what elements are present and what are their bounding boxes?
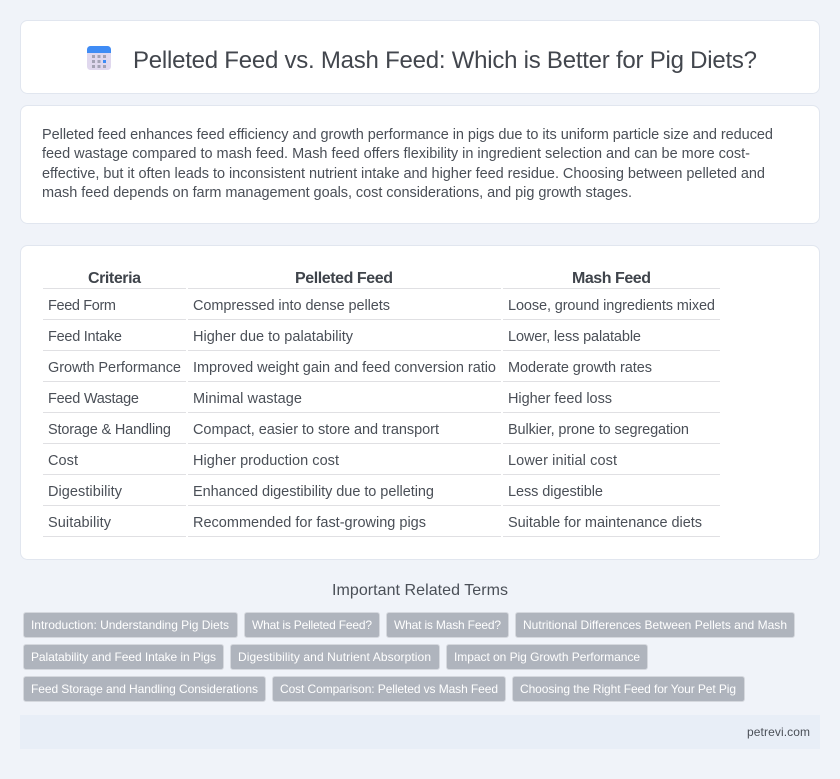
related terms chips: Cost Comparison: Pelleted vs Mash Feed [280, 682, 498, 696]
row: feed wastage: Minimal wastage [193, 391, 302, 407]
row: suitability [48, 515, 702, 531]
related terms chips: Choosing the Right Feed for Your Pet Pig [520, 682, 736, 696]
intro text: feed wastage compared to mash feed. Mash feed offers flexibility in ingredient selection and can be more cost- [42, 146, 750, 162]
row: feed intake: Higher due to palatability [193, 329, 354, 345]
row: suitability: Suitable for maintenance diets [508, 515, 702, 531]
row: storage and handling [48, 422, 689, 438]
row: digestibility: Enhanced digestibility due to pelleting [193, 484, 434, 500]
row: digestibility: Less digestible [508, 484, 603, 500]
related terms chips: Impact on Pig Growth Performance [454, 650, 640, 664]
title: Pelleted Feed vs. Mash Feed: Which is Better for Pig Diets? [133, 47, 757, 74]
row: feed wastage: Feed Wastage [48, 391, 139, 407]
row: cost: Higher production cost [193, 453, 339, 469]
row: cost: Lower initial cost [508, 453, 617, 469]
related terms heading: Important Related Terms [332, 582, 508, 599]
related terms chips: What is Pelleted Feed? [252, 618, 372, 632]
table header: Mash Feed [572, 270, 651, 287]
intro text: Pelleted feed enhances feed efficiency and growth performance in pigs due to its uniform particle size and reduced [42, 127, 773, 143]
icon: calendar [87, 46, 111, 70]
footer bar [20, 715, 820, 749]
related terms chips: Digestibility and Nutrient Absorption [238, 650, 431, 664]
row: growth performance: Improved weight gain and feed conversion ratio [193, 360, 496, 376]
row: feed intake [48, 329, 641, 345]
intro text [42, 127, 773, 201]
table header: Pelleted Feed [295, 270, 393, 287]
row: feed form: Loose, ground ingredients mixed [508, 298, 715, 314]
row: digestibility: Digestibility [48, 484, 123, 500]
row: feed wastage [48, 391, 612, 407]
header panel [20, 20, 820, 94]
row: digestibility [48, 484, 603, 500]
related terms chips: What is Mash Feed? [394, 618, 501, 632]
table header [88, 270, 651, 287]
row: cost [48, 453, 617, 469]
table header: Criteria [88, 270, 141, 287]
intro panel [20, 106, 820, 224]
row: growth performance: Moderate growth rates [508, 360, 652, 376]
related terms chips: Feed Storage and Handling Considerations [31, 682, 258, 696]
related terms chips: Introduction: Understanding Pig Diets [31, 618, 229, 632]
row: feed form: Feed Form [48, 298, 116, 314]
row: suitability: Suitability [48, 515, 112, 531]
row: storage and handling: Compact, easier to store and transport [193, 422, 439, 438]
row: feed form: Compressed into dense pellets [193, 298, 390, 314]
row: growth performance [48, 360, 652, 376]
row: feed intake: Feed Intake [48, 329, 122, 345]
related terms chips [24, 612, 794, 702]
comparison table panel [20, 246, 820, 560]
related terms chips: Nutritional Differences Between Pellets and Mash [523, 618, 787, 632]
footer site name: petrevi.com [747, 725, 810, 739]
row: feed wastage: Higher feed loss [508, 391, 612, 407]
row: feed intake: Lower, less palatable [508, 329, 641, 345]
row: cost: Cost [48, 453, 78, 469]
related terms chips: Palatability and Feed Intake in Pigs [31, 650, 216, 664]
row: storage and handling: Bulkier, prone to segregation [508, 422, 689, 438]
row: growth performance: Growth Performance [48, 360, 181, 376]
intro text: mash feed depends on farm management goals, cost considerations, and pig growth stages. [42, 185, 632, 201]
row: suitability: Recommended for fast-growing pigs [193, 515, 426, 531]
intro text: effective, but it often leads to inconsistent nutrient intake and higher feed residue. Choosing between pelleted and [42, 166, 765, 182]
row: feed form [48, 298, 715, 314]
row: storage and handling: Storage & Handling [48, 422, 171, 438]
